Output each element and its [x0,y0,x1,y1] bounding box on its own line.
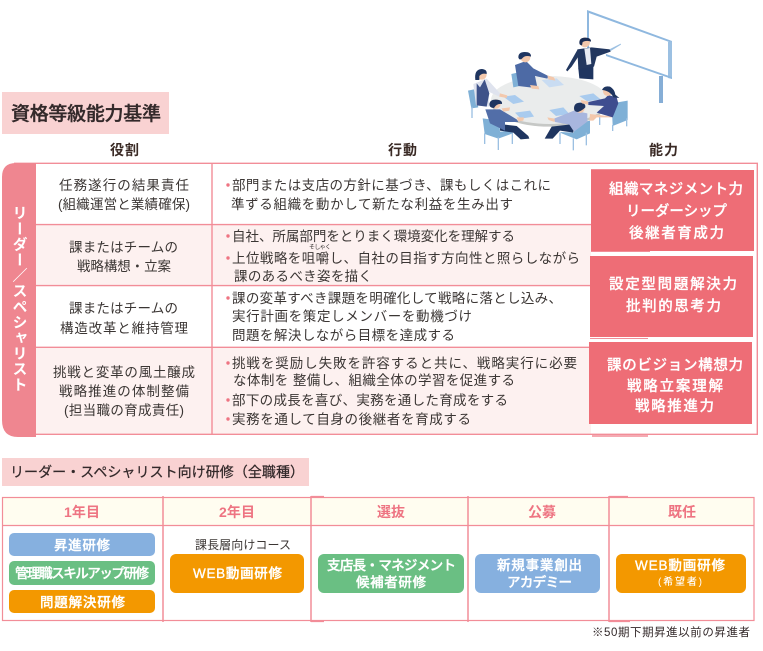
roles column: 挑戦と変革の風土醸成 [53,365,195,380]
behaviours: row 2: 上位戦略を咀嚼し、自社の目指す方向性と照らしながら [232,251,580,266]
vertical band: leader / specialist: リーダー／スペシャリスト [10,205,28,392]
heading: training for leaders and specialists: リーダー・スペシャリスト向け研修（全職種） [10,464,304,480]
behaviours: row 2: そしゃく [309,244,331,251]
pill: branch manager candidates [318,554,464,593]
heading: qualification standards [2,92,169,134]
behaviours: row 1: 準ずる組織を動かして新たな利益を生み出す [231,197,513,212]
icon: meeting table [491,76,608,127]
illustration: meeting around a table [468,10,672,150]
roles column: 課またはチームの [69,240,178,255]
column: open recruitment [475,504,600,593]
row backgrounds [36,225,591,434]
behaviours: row 4: 挑戦を奨励し失敗を許容すると共に、戦略実行に必要 [232,355,577,371]
heading: training for leaders and specialists [2,458,309,486]
behaviours: row 3: 課の変革すべき課題を明確化して戦略に落とし込み、 [232,291,562,306]
ability box 2: 批判的思考力 [626,298,721,315]
behaviours: row 3 [226,291,562,343]
pill: web video training, optional [616,554,746,593]
pill: web video training, optional: WEB動画研修 [635,558,726,573]
icon: whiteboard [587,10,672,103]
pill: promotion training [9,533,155,556]
roles column: (担当職の育成責任) [64,403,184,418]
ability box 2: 設定型問題解決力 [609,276,737,293]
icon: seated man, front right [545,103,590,150]
pill: problem-solving training [9,590,155,613]
column: first year [9,504,155,613]
header background [2,497,754,525]
behaviours: row 4: 実務を通して自身の後継者を育成する [232,412,471,427]
roles column: 戦略推進の体制整備 [59,384,189,399]
pill: management skill-up training: 管理職スキルアップ研修 [15,565,150,581]
pill: new business academy: アカデミー [507,574,572,590]
ability box 1: 後継者育成力 [629,225,724,242]
table grid [14,163,757,436]
roles column [53,178,195,418]
training table grid [2,496,754,622]
pill: promotion training: 昇進研修 [54,538,110,553]
behaviours: row 2: 自社、所属部門をとりまく環境変化を理解する [232,229,515,244]
column: selection [318,504,464,593]
column: selection: 選抜 [377,504,405,520]
pill: branch manager candidates: 支店長・マネジメント [327,558,456,573]
roles column: 任務遂行の結果責任 [59,178,189,193]
column header: ability: 能力 [649,142,678,158]
icon: seated woman, right [581,86,628,131]
column: incumbents [616,504,746,593]
panel: standards table [2,163,757,437]
behaviours: row 3: 実行計画を策定しメンバーを動機づけ [232,308,472,324]
ability box 3: 戦略推進力 [635,398,714,415]
icon: presenter [566,37,621,79]
behaviours: row 4 [226,355,577,427]
pill: management skill-up training [9,561,155,585]
ability box 2 [590,256,753,337]
roles column: 課またはチームの [69,301,178,316]
heading: qualification standards: 資格等級能力基準 [11,103,161,125]
column: first year: 1年目 [64,504,100,520]
ability box 1: 組織マネジメント力 [609,181,743,198]
column: incumbents: 既任 [668,504,696,520]
behaviours: row 4: な体制を 整備し、組織全体の学習を促進する [233,373,515,388]
column header: behaviour: 行動 [388,142,417,158]
behaviours: row 2 [226,229,580,284]
roles column: 戦略構想・立案 [77,259,172,274]
pill: web video training: WEB動画研修 [193,566,282,581]
panel: training table [2,496,754,622]
pill: new business academy [475,554,600,593]
pill: problem-solving training: 問題解決研修 [40,594,126,610]
column: second year: 課長層向けコース [195,537,291,552]
vertical band: leader / specialist [2,163,36,437]
footnote: ※50期下期昇進以前の昇進者 [592,625,750,639]
icon: seated man, front left [483,99,529,150]
ability box 3: 戦略立案理解 [627,378,724,395]
roles column: (組織運営と業績確保) [58,197,190,212]
ability box 1: リーダーシップ [626,202,728,220]
roles column: 構造改革と維持管理 [60,321,188,336]
icon: seated man, back [511,52,555,89]
pill: branch manager candidates: 候補者研修 [356,575,426,590]
column: open recruitment: 公募 [528,504,556,520]
column header: role: 役割 [110,142,139,158]
behaviours: row 4: 部下の成長を喜び、実務を通した育成をする [232,393,508,408]
ability box 1 [591,170,754,251]
column: second year: 2年目 [219,504,255,520]
ability box 3: 課のビジョン構想力 [607,356,743,374]
column: second year [170,504,304,593]
pill: web video training, optional: (希望者) [658,575,702,588]
icon: seated woman, left [468,69,507,118]
behaviours: row 2: 課のあるべき姿を描く [234,269,372,284]
behaviours: row 1 [226,177,551,212]
behaviours: row 3: 問題を解決しながら目標を達成する [232,328,455,343]
behaviours: row 1: 部門または支店の方針に基づき、課もしくはこれに [232,177,551,193]
pill: new business academy: 新規事業創出 [497,558,582,573]
ability box 3 [589,342,752,424]
